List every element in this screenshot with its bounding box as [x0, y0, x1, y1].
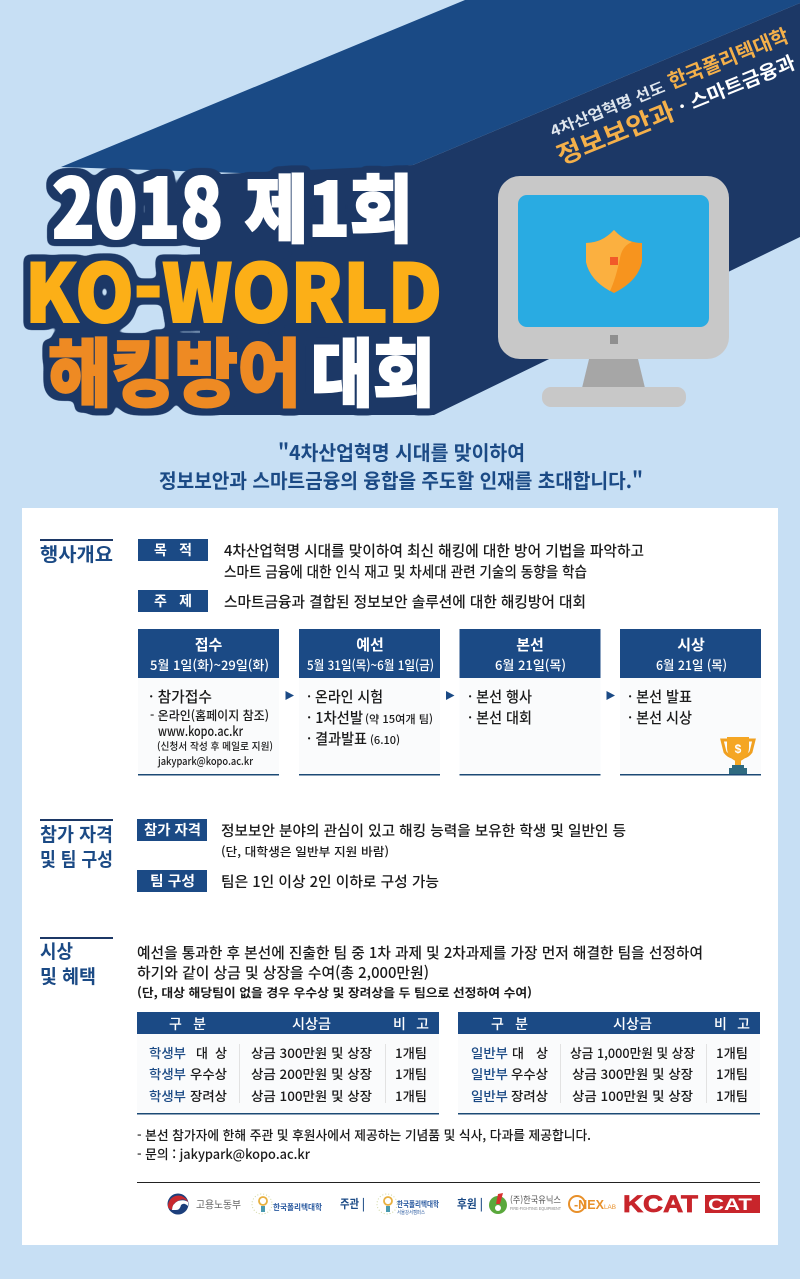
title: 제1회 — [245, 151, 413, 258]
table: general prizes: 1개팀 — [716, 1086, 748, 1105]
text: awards description: (단, 대상 해당팀이 없을 경우 우수상 및 장려상을 두 팀으로 선정하여 수여) — [137, 984, 532, 1001]
schedule: finals: · 본선 대회 — [468, 707, 532, 728]
section: awards — [40, 937, 703, 1001]
title — [25, 143, 442, 422]
arrow — [446, 691, 454, 700]
table: student prizes: 장려상 — [190, 1086, 227, 1105]
table: student prizes: 학생부 — [149, 1043, 186, 1062]
logo: yunix — [489, 1193, 561, 1214]
logo: kcat: KCAT — [623, 1191, 698, 1218]
text: awards description — [137, 942, 703, 1001]
logo: gnex lab: -NEX — [574, 1197, 604, 1212]
logo: cat: CAT — [708, 1195, 753, 1214]
table: student prizes: 학생부 — [149, 1064, 186, 1083]
diagonal department label: 4차산업혁명 선도 — [547, 76, 668, 142]
label: host: 주관 | — [340, 1195, 365, 1212]
text: eligibility — [221, 820, 626, 860]
table: student prizes: 학생부 — [149, 1086, 186, 1105]
text: team: 팀은 1인 이상 2인 이하로 구성 가능 — [221, 871, 439, 892]
logo: gnex lab: LAB — [604, 1205, 616, 1211]
table: student prizes: 1개팀 — [395, 1064, 427, 1083]
table: student prizes: 상금 200만원 및 상장 — [251, 1064, 372, 1083]
quote: "4차산업혁명 시대를 맞이하여 — [278, 437, 525, 466]
table: general prizes: 비 고 — [714, 1014, 750, 1034]
schedule: preliminary: (6.10) — [370, 732, 400, 748]
title: 대회 — [311, 315, 435, 422]
schedule: registration: 5월 1일(화)~29일(화) — [150, 655, 269, 674]
section: event overview: 행사개요 — [40, 540, 113, 567]
arrow — [286, 691, 294, 700]
label: theme — [138, 590, 208, 612]
text: eligibility: 정보보안 분야의 관심이 있고 해킹 능력을 보유한 학생 및 일반인 등 — [221, 820, 626, 841]
schedule: finals: · 본선 행사 — [468, 686, 532, 707]
logos strip — [168, 1191, 760, 1218]
table: general prizes: 장려상 — [511, 1086, 548, 1105]
label: eligibility: 참가 자격 — [144, 820, 201, 840]
table: general prizes: 우수상 — [511, 1064, 548, 1083]
logo: yunix: (주)한국유닉스 — [510, 1193, 561, 1206]
logo: ministry of employment and labor: 고용노동부 — [196, 1197, 241, 1212]
table: student prizes: 구 분 — [169, 1014, 206, 1034]
schedule: registration — [138, 629, 279, 776]
logo: yunix: FIRE-FIGHTING EQUIPMENT — [510, 1206, 561, 1211]
logo: korea polytechnics — [252, 1194, 323, 1214]
schedule: awards: 시상 — [677, 634, 705, 655]
notes: - 본선 참가자에 한해 주관 및 후원사에서 제공하는 기념품 및 식사, 다과를 제공합니다. — [137, 1125, 591, 1144]
schedule: registration: jakypark@kopo.ac.kr — [157, 753, 253, 769]
table: general prizes: 구 분 — [491, 1014, 528, 1034]
text: awards description: 하기와 같이 상금 및 상장을 수여(총 2,000만원) — [137, 962, 429, 983]
schedule: finals: 6월 21일(목) — [495, 655, 566, 674]
icon: trophy: $ — [735, 742, 742, 756]
text: purpose: 4차산업혁명 시대를 맞이하여 최신 해킹에 대한 방어 기법을 파악하고 — [224, 540, 644, 561]
table: student prizes: 시상금 — [292, 1014, 331, 1034]
logo: ministry of employment and labor — [168, 1194, 241, 1214]
arrow — [606, 691, 615, 700]
schedule: awards — [620, 629, 761, 776]
table: student prizes: 1개팀 — [395, 1043, 427, 1062]
logo: polytechnics seoul gangseo: 서울강서캠퍼스 — [397, 1209, 425, 1216]
table: general prizes: 일반부 — [471, 1086, 508, 1105]
panel: white content — [22, 508, 778, 1245]
label: team: 팀 구성 — [150, 871, 195, 891]
diagonal department label — [542, 20, 800, 172]
table: general prizes: 상금 300만원 및 상장 — [572, 1064, 693, 1083]
table: general prizes: 일반부 — [471, 1064, 508, 1083]
schedule: preliminary: · 1차선발 — [307, 707, 363, 728]
table: general prizes: 1개팀 — [716, 1043, 748, 1062]
section: event overview — [40, 539, 644, 612]
text: purpose: 스마트 금융에 대한 인식 재고 및 차세대 관련 기술의 동향을 학습 — [224, 561, 587, 582]
table: student prizes — [137, 1012, 439, 1114]
section: awards: 시상 — [40, 937, 73, 964]
text: awards description: 예선을 통과한 후 본선에 진출한 팀 중 1차 과제 및 2차과제를 가장 먼저 해결한 팀을 선정하여 — [137, 942, 703, 963]
schedule: preliminary: 예선 — [356, 634, 384, 655]
table: student prizes: 우수상 — [190, 1064, 227, 1083]
notes: - 문의 : jakypark@kopo.ac.kr — [137, 1144, 311, 1163]
label: purpose — [138, 539, 208, 561]
schedule: preliminary: 5월 31일(목)~6월 1일(금) — [307, 655, 434, 674]
quote: 정보보안과 스마트금융의 융합을 주도할 인재를 초대합니다." — [159, 465, 643, 494]
banner: 3D block — [61, 0, 800, 415]
section: awards: 및 혜택 — [40, 962, 96, 989]
schedule: preliminary: · 결과발표 — [307, 728, 367, 749]
label: team — [137, 870, 207, 892]
schedule: preliminary — [299, 629, 440, 776]
section: eligibility: 참가 자격 — [40, 820, 113, 847]
diagonal department label: · 스마트금융과 — [674, 48, 799, 120]
quote — [159, 437, 643, 494]
text: eligibility: (단, 대학생은 일반부 지원 바람) — [221, 843, 389, 860]
logo: gnex lab — [569, 1196, 616, 1212]
table: general prizes: 상금 1,000만원 및 상장 — [570, 1043, 695, 1062]
table: general prizes: 대 상 — [512, 1043, 548, 1062]
logo: cat — [705, 1195, 760, 1214]
table: general prizes: 1개팀 — [716, 1064, 748, 1083]
schedule: registration: · 참가접수 — [149, 686, 212, 707]
schedule: preliminary: · 온라인 시험 — [307, 686, 383, 707]
schedule: finals — [460, 629, 600, 776]
logo: polytechnics seoul gangseo — [377, 1194, 440, 1216]
label: purpose: 목 적 — [154, 540, 192, 560]
table: student prizes: 대 상 — [196, 1043, 227, 1062]
label: sponsors: 후원 | — [457, 1195, 483, 1212]
text: purpose — [224, 540, 644, 582]
text: theme: 스마트금융과 결합된 정보보안 솔루션에 대한 해킹방어 대회 — [224, 591, 586, 612]
title: KO-WORLD — [25, 230, 442, 346]
schedule: registration: - 온라인(홈페이지 참조) — [150, 705, 269, 724]
table: general prizes: 시상금 — [613, 1014, 652, 1034]
table: student prizes: 1개팀 — [395, 1086, 427, 1105]
logo: korea polytechnics: 한국폴리텍대학 — [273, 1202, 323, 1213]
table: student prizes: 상금 100만원 및 상장 — [251, 1086, 372, 1105]
schedule: preliminary: (약 15여개 팀) — [365, 711, 433, 727]
icon: trophy — [722, 737, 754, 774]
section: eligibility — [40, 819, 626, 892]
table: student prizes: 상금 300만원 및 상장 — [251, 1043, 372, 1062]
label: theme: 주 제 — [154, 591, 192, 611]
title: 2018 — [52, 143, 223, 262]
logo: polytechnics seoul gangseo: 한국폴리텍대학 — [397, 1199, 440, 1210]
schedule: awards: 6월 21일 (목) — [656, 655, 727, 674]
icon: monitor with shield — [498, 176, 729, 407]
schedule: awards: · 본선 시상 — [628, 707, 692, 728]
schedule: registration: 접수 — [195, 634, 222, 655]
table: general prizes — [458, 1012, 760, 1114]
diagonal department label: 정보보안과 — [551, 92, 680, 172]
schedule: finals: 본선 — [516, 634, 544, 655]
schedule: registration: www.kopo.ac.kr — [158, 721, 244, 740]
diagonal department label: 한국폴리텍대학 — [663, 20, 793, 95]
table: student prizes: 비 고 — [393, 1014, 429, 1034]
schedule: awards: · 본선 발표 — [628, 686, 692, 707]
table: general prizes: 일반부 — [471, 1043, 508, 1062]
schedule: registration: (신청서 작성 후 메일로 지원) — [157, 738, 273, 753]
section: eligibility: 및 팀 구성 — [40, 845, 113, 872]
notes — [137, 1125, 591, 1163]
table: general prizes: 상금 100만원 및 상장 — [572, 1086, 693, 1105]
title: 해킹방어 — [48, 315, 301, 422]
